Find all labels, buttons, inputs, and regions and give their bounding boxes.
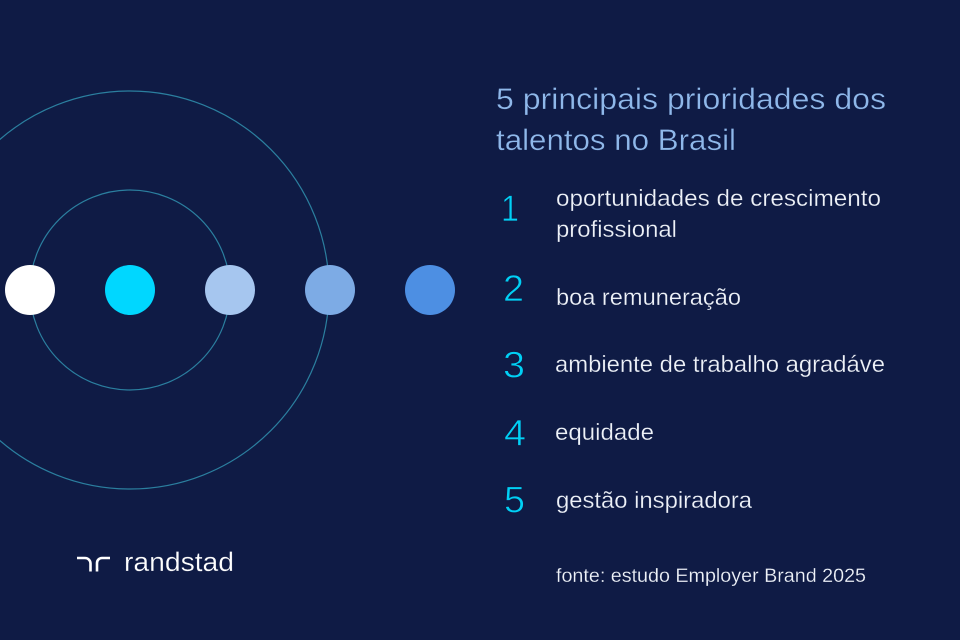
item 1: profissional: [556, 216, 677, 242]
item 1: 1: [501, 188, 519, 229]
concentric orbit rings: [0, 91, 329, 489]
title: [496, 83, 886, 157]
title: talentos no Brasil: [496, 124, 736, 157]
item 4: 4: [504, 412, 526, 454]
title: 5 principais prioridades dos: [496, 83, 886, 116]
item 1: [501, 185, 881, 242]
item 5: gestão inspiradora: [556, 487, 752, 513]
item 5: 5: [504, 480, 525, 520]
item 3: 3: [503, 344, 525, 386]
item 4: [504, 412, 654, 454]
item 5: [504, 480, 752, 520]
item 3: [503, 344, 885, 386]
item 3: ambiente de trabalho agradáve: [555, 351, 885, 377]
source note: fonte: estudo Employer Brand 2025: [556, 566, 866, 587]
icon: randstad mark: [77, 558, 110, 572]
item 2: [503, 268, 741, 310]
item 2: boa remuneração: [556, 284, 741, 310]
item 1: oportunidades de crescimento: [556, 185, 881, 211]
randstad logo: [77, 547, 234, 577]
item 2: 2: [503, 268, 524, 309]
wordmark: randstad: [124, 547, 234, 577]
item 4: equidade: [555, 419, 654, 445]
row of five priority dots: [5, 265, 455, 315]
